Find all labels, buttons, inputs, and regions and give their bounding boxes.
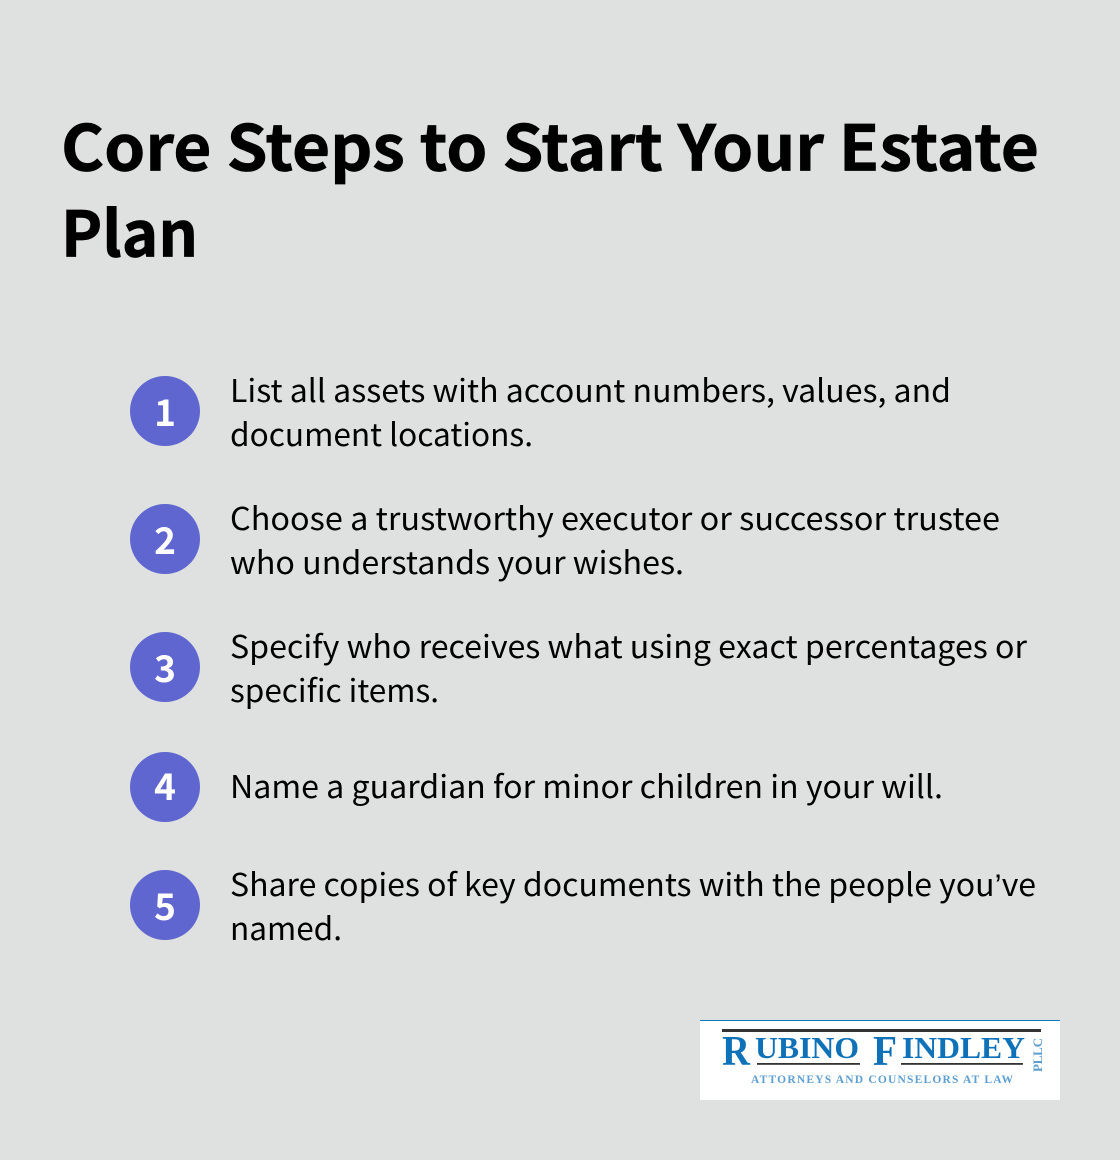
- title: Core Steps to Start Your Estate: [61, 98, 1039, 190]
- logo: Rubino Findley: INDLEY: [902, 1030, 1025, 1065]
- text: step 1: List all assets with account numbers, values, and: [230, 366, 951, 412]
- step 3: [130, 622, 1028, 712]
- logo: Rubino Findley: ATTORNEYS AND COUNSELORS AT LAW: [751, 1074, 1014, 1086]
- icon: number 4 badge: 4: [154, 757, 176, 811]
- logo: Rubino Findley: UBINO: [755, 1030, 859, 1065]
- title: [61, 98, 1039, 276]
- icon: number 3 badge: 3: [154, 639, 176, 693]
- icon: number 2 badge: [130, 504, 200, 574]
- step 2: [130, 494, 1000, 584]
- text: step 1: document locations.: [230, 410, 533, 456]
- icon: number 4 badge: [130, 752, 200, 822]
- logo: Rubino Findley: F: [873, 1029, 897, 1075]
- text: step 3: [230, 622, 1028, 712]
- text: step 3: Specify who receives what using exact percentages or: [230, 622, 1028, 668]
- title: Plan: [61, 184, 198, 276]
- icon: number 5 badge: [130, 870, 200, 940]
- text: step 4: Name a guardian for minor children in your will.: [230, 762, 943, 808]
- step 5: [130, 860, 1036, 950]
- icon: number 1 badge: 1: [154, 383, 176, 437]
- text: step 5: [230, 860, 1036, 950]
- step 4: [130, 752, 943, 822]
- logo: Rubino Findley: PLLC: [1030, 1038, 1045, 1072]
- text: step 1: [230, 366, 951, 456]
- logo: Rubino Findley: [700, 1020, 1060, 1100]
- icon: number 1 badge: [130, 376, 200, 446]
- text: step 2: who understands your wishes.: [230, 538, 684, 584]
- text: step 2: [230, 494, 1000, 584]
- text: step 5: named.: [230, 904, 342, 950]
- logo: Rubino Findley: R: [722, 1029, 751, 1075]
- icon: number 2 badge: 2: [154, 511, 176, 565]
- icon: number 3 badge: [130, 632, 200, 702]
- step 1: [130, 366, 951, 456]
- text: step 2: Choose a trustworthy executor or successor trustee: [230, 494, 1000, 540]
- icon: number 5 badge: 5: [154, 877, 176, 931]
- text: step 5: Share copies of key documents with the people you ’ve: [230, 860, 1036, 906]
- text: step 3: specific items.: [230, 666, 439, 712]
